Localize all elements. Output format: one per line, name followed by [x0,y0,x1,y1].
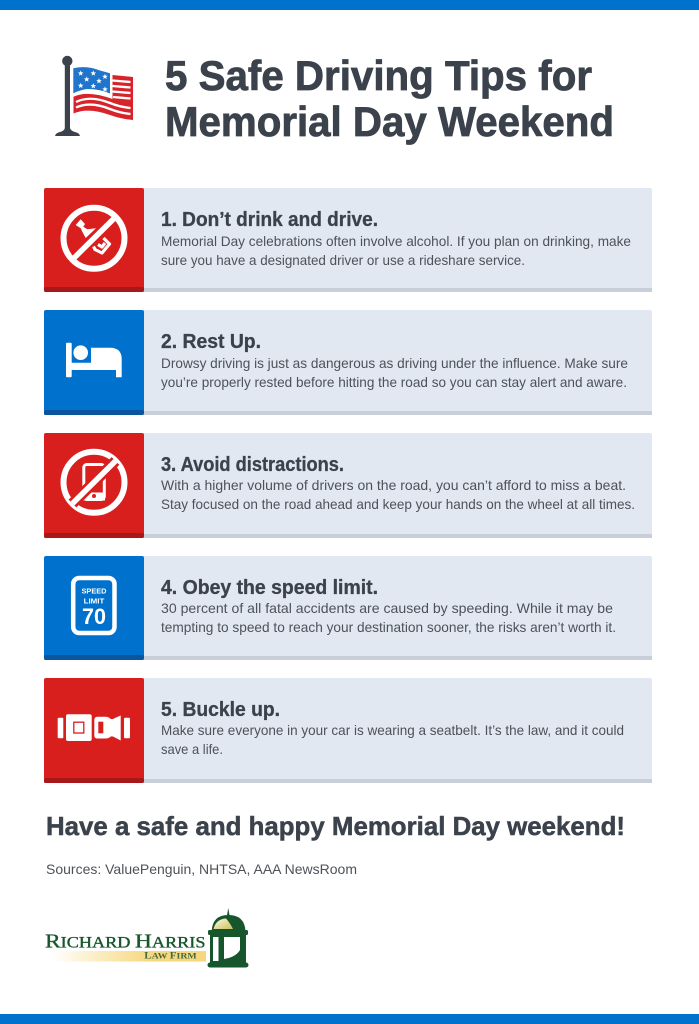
icon: seatbelt buckle [58,714,130,741]
text block: sure you have a designated driver or use a rideshare service. [161,252,525,268]
icon: speed limit sign: 70 [82,604,106,629]
text block [161,722,624,757]
logo: Richard Harris Law Firm: RICHARD HARRIS [45,931,206,953]
icon: bed [66,343,122,377]
panel: tip 1 [44,188,652,292]
icon: domed building [208,908,248,968]
heading: 2. Rest Up. [161,331,261,353]
heading: 1. Don’t drink and drive. [161,209,378,231]
icon: no phone [64,452,124,513]
title: 5 Safe Driving Tips for [165,52,592,99]
logo: Richard Harris Law Firm: LAW FIRM [144,950,197,960]
panel: tip 4 [44,556,652,660]
icon: speed limit sign: LIMIT [84,596,105,605]
heading: 3. Avoid distractions. [161,454,344,476]
heading: 4. Obey the speed limit. [161,577,378,599]
title: Memorial Day Weekend [165,98,614,145]
icon: flag on pole [55,56,133,136]
heading: 5. Buckle up. [161,699,280,721]
icon: no alcohol [64,208,124,269]
icon: speed limit sign: SPEED [82,586,107,595]
text block: Memorial Day celebrations often involve alcohol. If you plan on drinking, make [161,233,631,249]
icon: speed limit sign [73,578,114,633]
text block [161,477,635,512]
text block: you’re properly rested before hitting the road so you can stay alert and aware. [161,374,627,390]
bottom bar [0,1014,699,1024]
text block: 30 percent of all fatal accidents are caused by speeding. While it may be [161,600,613,616]
sources: Sources: ValuePenguin, NHTSA, AAA NewsRoom [46,861,357,877]
text block: With a higher volume of drivers on the road, you can’t afford to miss a beat. [161,477,626,493]
top bar [0,0,699,10]
panel: tip 2 [44,310,652,415]
text block [161,355,628,390]
text block: tempting to speed to reach your destination sooner, the risks aren’t worth it. [161,619,616,635]
text block: Make sure everyone in your car is wearing a seatbelt. It’s the law, and it could [161,722,624,738]
panel: tip 5 [44,678,652,783]
closing message: Have a safe and happy Memorial Day weekend! [46,811,625,841]
text block [161,233,631,268]
title [165,52,614,145]
logo: Richard Harris Law Firm [45,908,248,968]
text block [161,600,616,635]
text block: Stay focused on the road ahead and keep your hands on the wheel at all times. [161,496,635,512]
text block: save a life. [161,741,223,757]
panel: tip 3 [44,433,652,538]
text block: Drowsy driving is just as dangerous as driving under the influence. Make sure [161,355,628,371]
